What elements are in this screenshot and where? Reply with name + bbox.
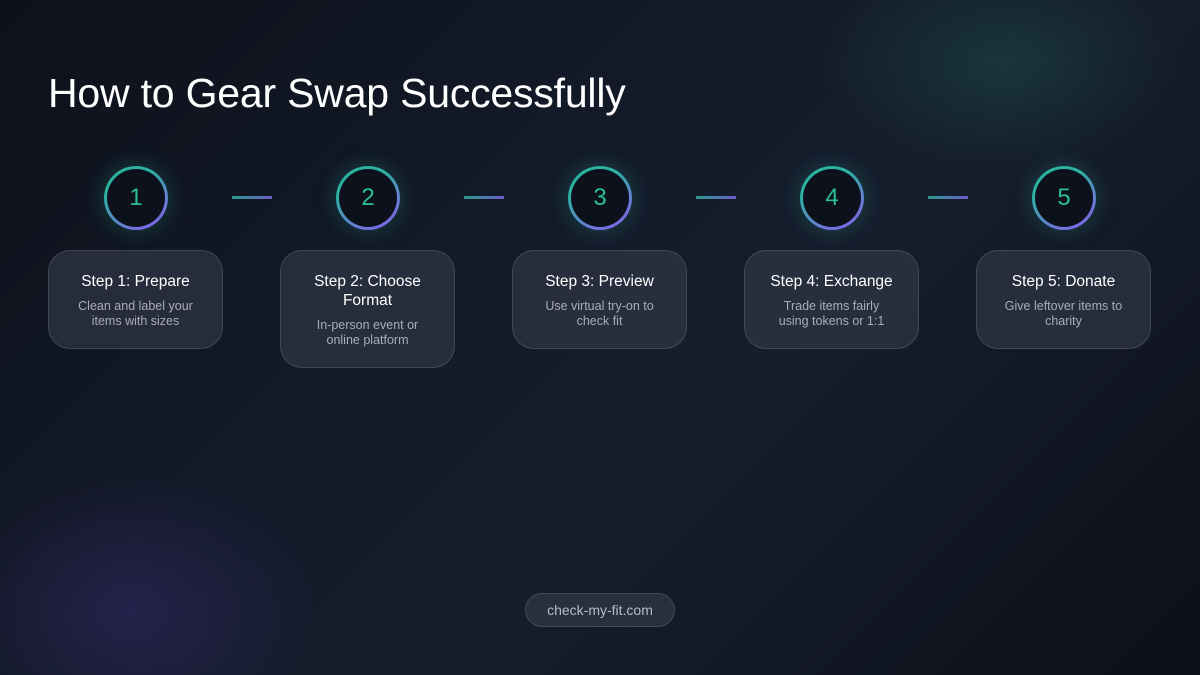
connector 2 bbox=[464, 196, 504, 199]
connector 3 bbox=[696, 196, 736, 199]
card: step 2: Step 2: Choose bbox=[314, 273, 421, 290]
card: step 3: Use virtual try-on to bbox=[545, 299, 654, 313]
step 3 circle bbox=[568, 166, 632, 230]
card: step 5: charity bbox=[1045, 314, 1082, 328]
step 3 circle: 3 bbox=[593, 184, 607, 211]
card: step 1: items with sizes bbox=[92, 314, 179, 328]
card: step 1: Step 1: Prepare bbox=[81, 273, 190, 290]
title: How to Gear Swap Successfully bbox=[48, 70, 626, 116]
card: step 1 bbox=[48, 250, 223, 349]
card: step 4 bbox=[744, 250, 919, 349]
step 1 circle bbox=[104, 166, 168, 230]
connector 1 bbox=[232, 196, 272, 199]
card: step 2: online platform bbox=[326, 333, 408, 347]
card: step 1: Clean and label your bbox=[78, 299, 193, 313]
card: step 3 bbox=[512, 250, 687, 349]
card: step 5: Step 5: Donate bbox=[1012, 273, 1115, 290]
card: step 4: using tokens or 1:1 bbox=[779, 314, 884, 328]
card: step 3: Step 3: Preview bbox=[545, 273, 654, 290]
card: step 2: Format bbox=[343, 292, 392, 309]
card: step 2 bbox=[280, 250, 455, 368]
step 1 circle: 1 bbox=[129, 184, 143, 211]
card: step 4: Step 4: Exchange bbox=[770, 273, 893, 290]
card: step 5: Give leftover items to bbox=[1005, 299, 1122, 313]
card: step 5 bbox=[976, 250, 1151, 349]
step 2 circle bbox=[336, 166, 400, 230]
footer badge bbox=[525, 593, 675, 627]
step 5 circle bbox=[1032, 166, 1096, 230]
step 4 circle: 4 bbox=[825, 184, 839, 211]
step 2 circle: 2 bbox=[361, 184, 375, 211]
card: step 3: check fit bbox=[577, 314, 622, 328]
footer badge: check-my-fit.com bbox=[547, 602, 653, 618]
card: step 4: Trade items fairly bbox=[784, 299, 879, 313]
step 5 circle: 5 bbox=[1057, 184, 1071, 211]
card: step 2: In-person event or bbox=[317, 318, 418, 332]
step 4 circle bbox=[800, 166, 864, 230]
connector 4 bbox=[928, 196, 968, 199]
